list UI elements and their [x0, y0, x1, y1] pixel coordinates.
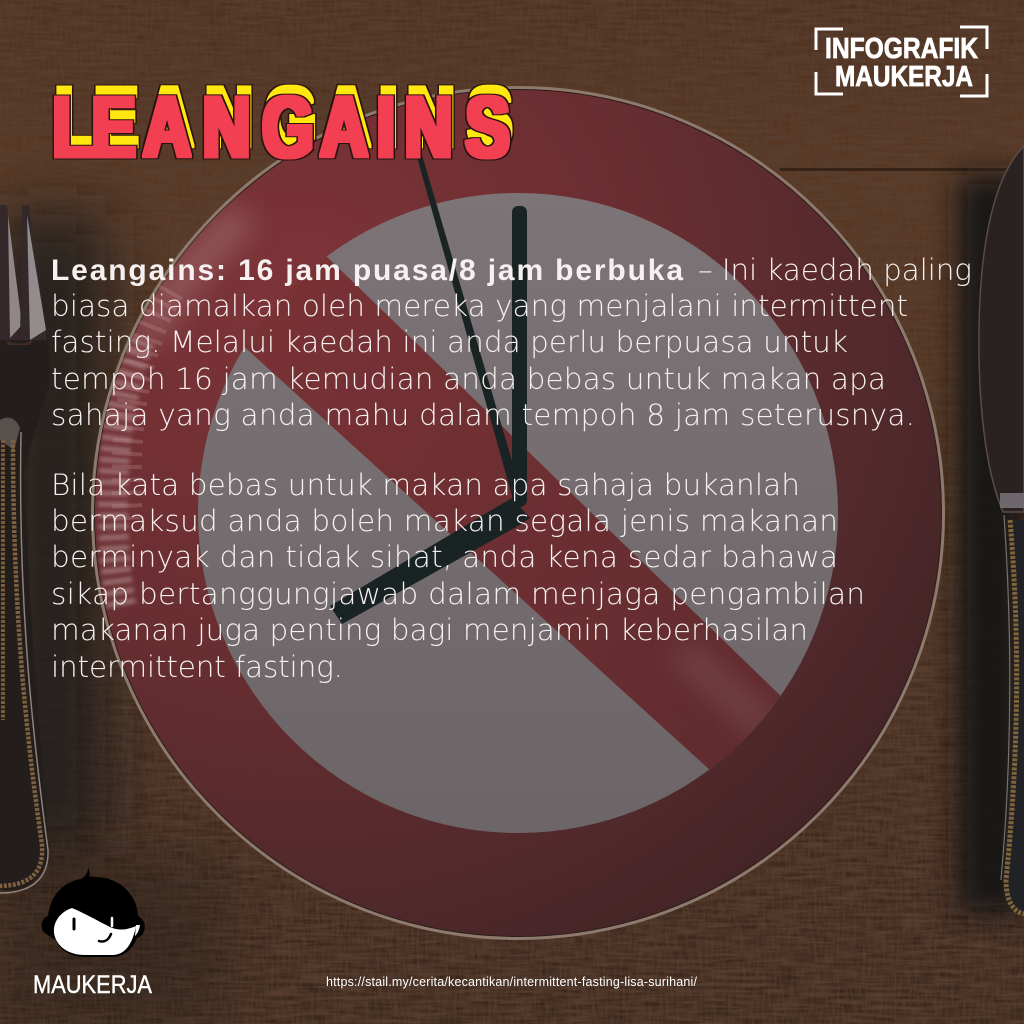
paragraph one: tempoh 16 jam kemudian anda bebas untuk makan apa — [51, 362, 886, 396]
mascot logo — [42, 868, 145, 957]
source url: https://stail.my/cerita/kecantikan/intermittent-fasting-lisa-surihani/ — [326, 975, 698, 989]
body text — [51, 253, 972, 684]
logo text: MAUKERJA — [835, 61, 973, 93]
logo frame corners — [816, 27, 987, 96]
paragraph one: sahaja yang anda mahu dalam tempoh 8 jam seterusnya. — [51, 398, 915, 432]
title: LEANGAINS — [52, 79, 510, 176]
paragraph one — [51, 253, 972, 432]
mascot face — [54, 908, 136, 955]
paragraph two — [51, 468, 865, 684]
mascot head and hair — [42, 868, 145, 957]
hour hand — [512, 206, 527, 506]
mascot right eye highlight — [111, 918, 113, 926]
paragraph two: berminyak dan tidak sihat, anda kena sedar bahawa — [51, 540, 838, 574]
logo: Infografik Maukerja — [816, 27, 987, 96]
mascot eyes — [72, 919, 76, 929]
paragraph two: Bila kata bebas untuk makan apa sahaja bukanlah — [51, 468, 800, 502]
short minute hand — [330, 498, 530, 624]
mascot ear — [135, 925, 140, 936]
thin second hand — [415, 148, 525, 510]
clock hands — [330, 148, 530, 624]
paragraph two: makanan juga penting bagi menjamin keberhasilan — [51, 613, 808, 647]
inner no-entry disc with diagonal band — [198, 193, 838, 833]
plate glare on left rim — [113, 215, 245, 610]
plate — [92, 88, 944, 938]
paragraph two: bermaksud anda boleh makan segala jenis makanan — [51, 504, 838, 538]
brand name: MAUKERJA — [33, 971, 152, 999]
paragraph one: Leangains: 16 jam puasa/8 jam berbuka — [51, 254, 683, 287]
paragraph two: intermittent fasting. — [51, 650, 343, 684]
red plate surface — [95, 90, 941, 936]
paragraph two: sikap bertanggungjawab dalam menjaga pengambilan — [51, 577, 865, 611]
paragraph one: fasting. Melalui kaedah ini anda perlu berpuasa untuk — [51, 325, 848, 359]
knife — [979, 146, 1024, 915]
fork — [0, 205, 50, 893]
paragraph one: – Ini kaedah paling — [698, 253, 972, 287]
plate rim — [92, 88, 944, 938]
mascot smile — [99, 934, 111, 942]
logo text: INFOGRAFIK — [825, 33, 978, 65]
paragraph one: biasa diamalkan oleh mereka yang menjalani intermittent — [51, 289, 908, 323]
